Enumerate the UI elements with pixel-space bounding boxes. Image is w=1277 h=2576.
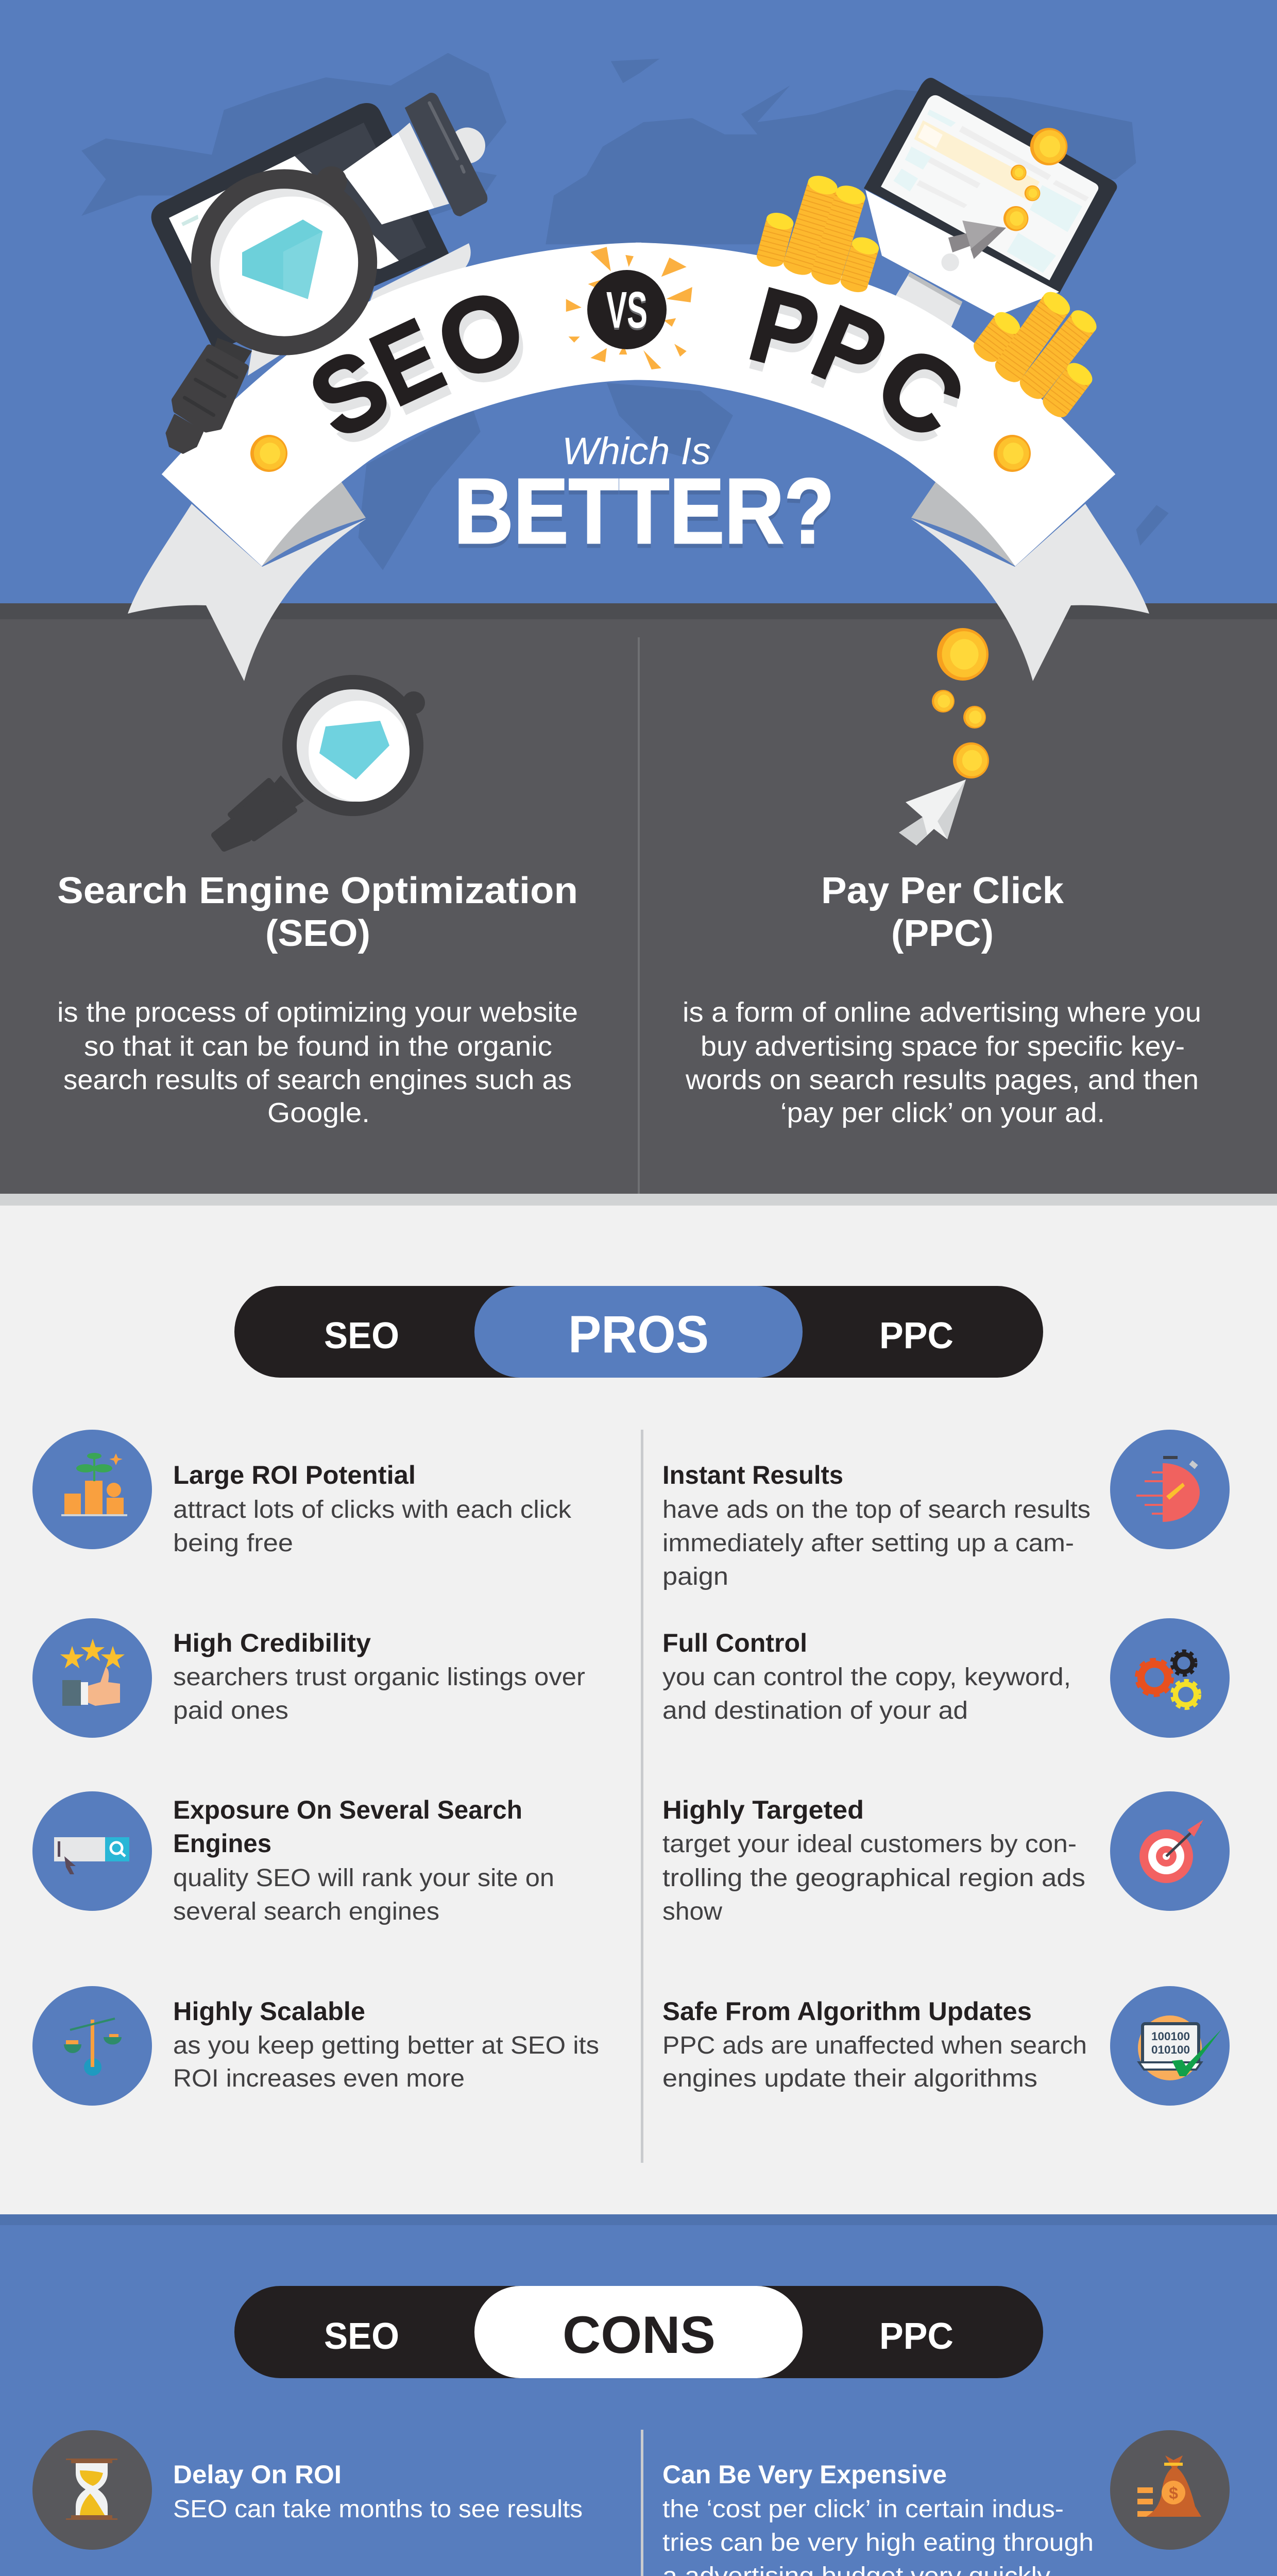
text: SEO definition: Google.	[267, 1097, 370, 1128]
icon: laptop with check: 100100	[1151, 2030, 1190, 2043]
title: PPC on ribbon: C	[855, 322, 985, 462]
item: Large ROI Potential: being free	[173, 1530, 293, 1557]
item: Large ROI Potential: Large ROI Potential	[173, 1461, 416, 1489]
pros header pill: PROS	[568, 1305, 709, 1364]
text: PPC definition	[683, 997, 1201, 1128]
item: Safe From Algorithm Updates: engines update their algorithms	[662, 2065, 1037, 2092]
cons header pill: CONS	[563, 2306, 716, 2364]
text: SEO definition: is the process of optimizing your website	[57, 997, 578, 1028]
icon: thumbs up with stars: ★	[58, 1640, 86, 1675]
item: Highly Scalable	[173, 1997, 599, 2092]
title: PPC on ribbon: P	[739, 265, 830, 395]
icon: laptop with check	[1110, 1986, 1230, 2106]
pros header pill: PPC	[879, 1315, 954, 1357]
item: Safe From Algorithm Updates: PPC ads are unaffected when search	[662, 2032, 1087, 2059]
subtitle: Which Is: Which Is	[562, 430, 711, 472]
item: Delay On ROI: SEO can take months to see results	[173, 2496, 583, 2523]
icon: stopwatch	[1110, 1430, 1230, 1549]
heading: SEO: (SEO)	[265, 913, 370, 954]
item: Highly Targeted: show	[662, 1898, 722, 1925]
item: Highly Scalable: Highly Scalable	[173, 1997, 365, 2026]
cons header pill: PPC	[879, 2316, 954, 2357]
item: Large ROI Potential: attract lots of clicks with each click	[173, 1496, 572, 1523]
heading: PPC	[821, 870, 1064, 954]
item: Delay On ROI	[173, 2460, 583, 2523]
item: Can Be Very Expensive: Can Be Very Expensive	[662, 2460, 947, 2489]
panel: pros	[0, 1206, 1277, 2214]
title: SEO on ribbon	[291, 265, 544, 471]
title: SEO on ribbon: S	[296, 336, 413, 471]
item: Highly Targeted: trolling the geographical region ads	[662, 1865, 1085, 1892]
item: Instant Results: Instant Results	[662, 1461, 843, 1489]
item: Instant Results: have ads on the top of search results	[662, 1496, 1091, 1523]
title: SEO on ribbon: O	[422, 265, 539, 404]
title: SEO on ribbon: S	[291, 326, 407, 462]
item: Large ROI Potential	[173, 1461, 572, 1557]
text: PPC definition: buy advertising space for specific key-	[701, 1031, 1185, 1062]
text: SEO definition: search results of search engines such as	[63, 1064, 572, 1095]
item: Exposure On Several Search Engines: Exposure On Several Search	[173, 1795, 522, 1824]
item: Highly Scalable: ROI increases even more	[173, 2065, 465, 2092]
heading: SEO	[57, 870, 578, 954]
item: Safe From Algorithm Updates	[662, 1997, 1087, 2092]
title: PPC on ribbon: P	[797, 283, 902, 416]
hero bottom strip	[0, 603, 1277, 619]
item: Exposure On Several Search Engines: quality SEO will rank your site on	[173, 1865, 554, 1892]
title: PPC on ribbon	[737, 265, 985, 472]
item: Instant Results: immediately after setting up a cam-	[662, 1530, 1074, 1557]
item: Instant Results	[662, 1461, 1091, 1590]
item: Exposure On Several Search Engines	[173, 1795, 554, 1925]
icon: money bag	[1110, 2430, 1230, 2550]
title: SEO on ribbon: E	[361, 307, 465, 438]
coin stacks	[755, 173, 1101, 422]
item: Full Control	[662, 1629, 1071, 1724]
heading: PPC: Pay Per Click	[821, 870, 1064, 911]
item: High Credibility: paid ones	[173, 1697, 288, 1724]
icon: gears	[1110, 1618, 1230, 1738]
item: Full Control: you can control the copy, keyword,	[662, 1664, 1071, 1691]
title: VS badge: VS	[606, 283, 648, 341]
item: Exposure On Several Search Engines: Engines	[173, 1829, 271, 1858]
icon: hourglass	[32, 2430, 152, 2550]
icon: magnifying glass with diamond	[166, 166, 377, 453]
icon: target	[1110, 1791, 1230, 1911]
item: Highly Scalable: as you keep getting better at SEO its	[173, 2032, 599, 2059]
item: High Credibility: High Credibility	[173, 1629, 371, 1657]
icon: money bag: $	[1169, 2484, 1178, 2502]
item: Safe From Algorithm Updates: Safe From Algorithm Updates	[662, 1997, 1032, 2026]
item: Full Control: Full Control	[662, 1629, 807, 1657]
item: Can Be Very Expensive	[662, 2460, 1094, 2576]
item: Instant Results: paign	[662, 1563, 728, 1590]
pros header pill: SEO	[324, 1315, 399, 1357]
item: Can Be Very Expensive: the ‘cost per click’ in certain indus-	[662, 2496, 1064, 2523]
hero background	[0, 0, 1277, 603]
title: PPC on ribbon: C	[854, 332, 983, 472]
text: PPC definition: words on search results pages, and then	[685, 1064, 1199, 1095]
item: Exposure On Several Search Engines: several search engines	[173, 1898, 439, 1925]
ribbon banner	[162, 243, 1115, 566]
text: SEO definition	[57, 997, 578, 1128]
icon: balance scale	[32, 1986, 152, 2106]
title: BETTER?: BETTER?	[454, 464, 835, 567]
text: SEO definition: so that it can be found in the organic	[84, 1031, 552, 1062]
title: VS badge: VS	[606, 281, 648, 339]
icon: laptop with check: 010100	[1151, 2043, 1190, 2056]
item: High Credibility	[173, 1629, 585, 1724]
heading: SEO: Search Engine Optimization	[57, 870, 578, 911]
illustration: tablet with search results	[864, 78, 1117, 328]
icon: coins and cursor	[899, 628, 989, 845]
panel: cons	[0, 2214, 1277, 2576]
definitions panel	[0, 619, 1277, 1206]
item: Delay On ROI: Delay On ROI	[173, 2460, 342, 2489]
icon: coins and plant	[32, 1430, 152, 1549]
icon: magnifier with diamond	[214, 675, 425, 849]
title: SEO on ribbon: E	[355, 297, 459, 429]
title: VS badge	[566, 247, 692, 369]
heading: PPC: (PPC)	[891, 913, 994, 954]
world map	[81, 53, 1169, 570]
icon: search bar	[32, 1791, 152, 1911]
item: Highly Targeted: target your ideal customers by con-	[662, 1831, 1077, 1858]
icon: thumbs up with stars	[32, 1618, 152, 1738]
ribbon tails	[128, 481, 1149, 681]
illustration: tablet and megaphone	[151, 93, 487, 376]
cons header pill	[234, 2286, 1043, 2378]
icon: thumbs up with stars: ★	[79, 1633, 107, 1668]
title: PPC on ribbon: P	[796, 293, 900, 426]
text: PPC definition: ‘pay per click’ on your ad.	[780, 1097, 1105, 1128]
ribbon coins	[250, 435, 1031, 472]
item: Highly Targeted	[662, 1795, 1085, 1925]
cons header pill: SEO	[324, 2316, 399, 2357]
icon: thumbs up with stars: ★	[99, 1640, 127, 1675]
text: PPC definition: is a form of online advertising where you	[683, 997, 1201, 1028]
title: PPC on ribbon: P	[737, 275, 829, 405]
pros header pill	[234, 1286, 1043, 1378]
item: Can Be Very Expensive: tries can be very high eating through	[662, 2529, 1094, 2556]
item: Highly Targeted: Highly Targeted	[662, 1795, 864, 1824]
title: BETTER?: BETTER?	[454, 460, 835, 563]
title: SEO on ribbon: O	[427, 275, 544, 414]
item: Full Control: and destination of your ad	[662, 1697, 968, 1724]
item: High Credibility: searchers trust organic listings over	[173, 1664, 585, 1691]
